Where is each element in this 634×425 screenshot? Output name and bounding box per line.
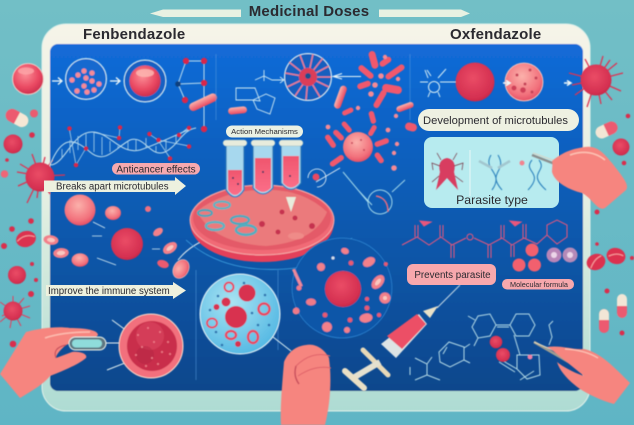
banner arrow: Breaks apart microtubules: Breaks apart microtubules	[56, 182, 169, 192]
label: Molecular formula: Molecular formula	[510, 280, 569, 289]
radial cell	[284, 54, 332, 100]
virus cell: right	[569, 56, 623, 107]
large cell	[106, 314, 183, 378]
hand with tweezers: top right	[532, 147, 627, 209]
left margin pills and cells	[1, 64, 43, 347]
label: Development of microtubules: Development of microtubules	[423, 115, 568, 127]
virus cell: small left	[0, 296, 30, 328]
DNA helix	[50, 125, 196, 167]
oxfendazole cell sequence	[420, 62, 571, 102]
label: Prevents parasite: Prevents parasite	[414, 270, 491, 281]
hand with tweezers: bottom right	[534, 342, 630, 404]
icon: DNA strand	[520, 160, 546, 190]
label: Molecular formula	[502, 279, 574, 290]
tablet frame	[42, 24, 590, 411]
process: cell division row	[52, 58, 166, 102]
micrograph circle: left	[200, 274, 291, 354]
panel: Parasite type: Parasite type	[456, 193, 528, 207]
icon: parasite insect	[432, 153, 463, 190]
molecule: top left	[175, 58, 218, 132]
hand with capsule: bottom left	[0, 327, 98, 398]
label: Action Mechanisms: Action Mechanisms	[231, 127, 298, 136]
label: Action Mechanisms	[226, 126, 303, 138]
pink molecular chain	[402, 220, 567, 258]
white molecule bottom	[410, 314, 553, 380]
test tubes	[223, 140, 303, 212]
bacteria cluster	[324, 50, 418, 171]
micrograph circle: right	[292, 238, 392, 338]
syringe	[345, 285, 460, 388]
label: Prevents parasite	[407, 264, 496, 285]
label: Development of microtubules	[418, 109, 579, 131]
petri dish	[186, 185, 352, 269]
banner arrow: Improve the immune system	[46, 282, 186, 299]
pill: center top	[228, 106, 247, 115]
title banner: Medicinal Doses	[249, 3, 369, 20]
immune cells group	[43, 194, 210, 281]
icon: DNA strand with wings	[479, 155, 510, 190]
small molecule: center top	[236, 70, 284, 114]
capsule	[69, 337, 106, 350]
label: Anticancer effects: Anticancer effects	[116, 164, 196, 175]
screen panel	[50, 44, 583, 391]
right margin pills and cells	[584, 114, 634, 336]
panel: Parasite type	[424, 137, 559, 208]
small target icon: center	[343, 172, 405, 214]
heading: Fenbendazole: Fenbendazole	[83, 26, 185, 43]
virus cell: left	[17, 154, 65, 203]
banner arrow: Improve the immune system: Improve the immune system	[48, 286, 170, 297]
title banner	[150, 3, 470, 20]
heading: Oxfendazole: Oxfendazole	[450, 26, 541, 43]
banner arrow: Breaks apart microtubules	[44, 177, 186, 195]
divider lines	[196, 54, 410, 380]
hand: bottom center	[281, 345, 331, 425]
